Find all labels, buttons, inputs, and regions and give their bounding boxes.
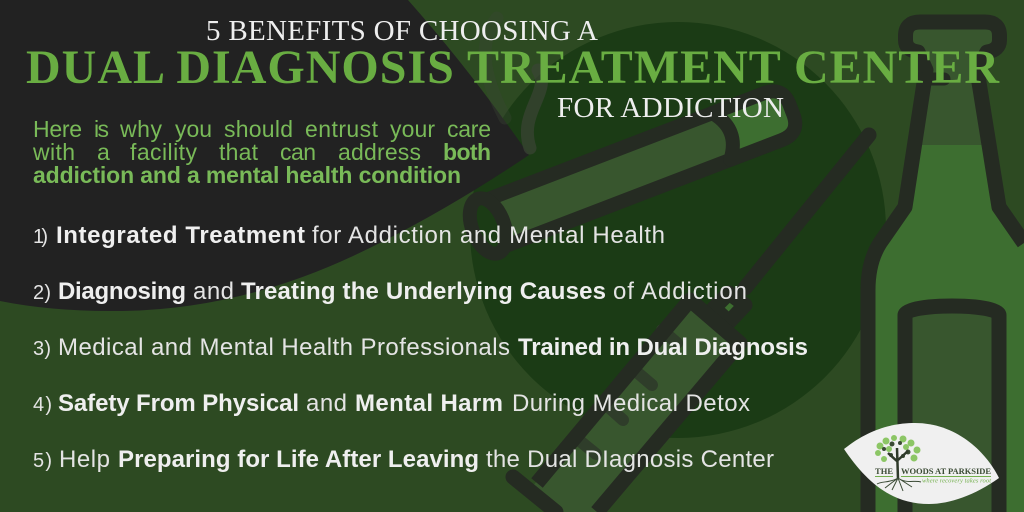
intro text [32, 116, 491, 188]
list item 4: Safety From Physical [58, 390, 299, 417]
list item 1: 1) [33, 226, 48, 248]
intro text: your [390, 116, 435, 142]
icon: cigarette smoke [485, 18, 541, 148]
list item 5: the Dual DIagnosis Center [486, 446, 774, 473]
intro text: should [224, 116, 293, 142]
intro text: why [119, 116, 162, 142]
intro text: a [97, 139, 110, 165]
list item 2: and [193, 278, 234, 305]
intro text: facility [130, 139, 198, 165]
list item 2: Treating the Underlying Causes [241, 278, 606, 305]
intro text: both [443, 139, 491, 165]
list item 5: Help [59, 446, 110, 473]
logo: The Woods at Parkside [844, 423, 999, 504]
icon: bottle [868, 22, 1024, 512]
list item 4: Mental Harm [355, 390, 503, 417]
list item 4: 4) [33, 394, 52, 416]
logo: The Woods at Parkside: WOODS AT PARKSIDE [901, 466, 991, 476]
dark corner panel [0, 0, 529, 311]
list item 5: Preparing for Life After Leaving [118, 446, 479, 473]
list item 3: Medical and Mental Health Professionals [58, 334, 510, 361]
list item 5: 5) [33, 450, 52, 472]
intro text: care [447, 116, 491, 142]
list item 4: During Medical Detox [512, 390, 750, 417]
intro text: entrust [305, 116, 379, 142]
icon: cigarette [463, 82, 802, 259]
title line 2: DUAL DIAGNOSIS TREATMENT CENTER [26, 41, 1000, 94]
intro text: can [280, 139, 316, 165]
intro text: address [338, 139, 421, 165]
list item 1: for Addiction and Mental Health [312, 222, 665, 249]
list item 4: and [306, 390, 347, 417]
list item 3: Trained in Dual Diagnosis [518, 334, 808, 361]
intro text: you [175, 116, 212, 142]
title line 1: 5 BENEFITS OF CHOOSING A [206, 15, 598, 47]
intro text: that [219, 139, 259, 165]
list item 3: 3) [33, 338, 51, 360]
intro text: addiction and a mental health condition [33, 162, 461, 188]
logo wordmark: THE [875, 466, 893, 476]
icon: tree [875, 435, 921, 491]
list item 2: Diagnosing [58, 278, 186, 305]
intro text: is [94, 116, 109, 142]
background circle [470, 22, 886, 438]
intro text: Here [33, 116, 82, 142]
list item 2: 2) [33, 282, 51, 304]
logo tagline: where recovery takes root [922, 478, 991, 484]
icon: syringe [513, 135, 869, 512]
list item 1: Integrated Treatment [56, 222, 305, 249]
title line 3: FOR ADDICTION [557, 92, 784, 124]
intro text: with [32, 139, 75, 165]
list item 2: of Addiction [613, 278, 747, 305]
